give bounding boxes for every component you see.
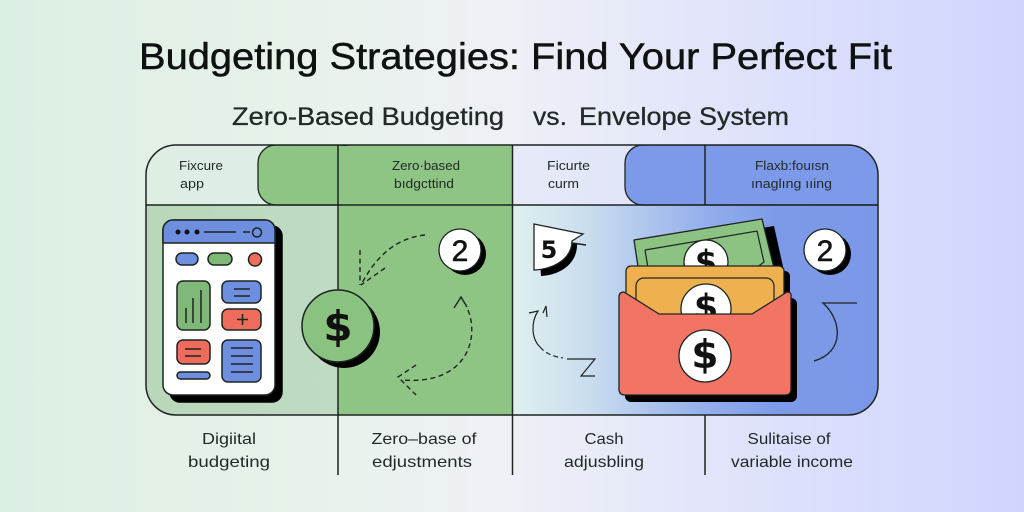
icon: number 2 badge blue panel bbox=[804, 229, 851, 275]
icon: red envelope bbox=[619, 292, 791, 395]
caption: suitable for variable income: Sulitaise of bbox=[748, 431, 831, 448]
caption: zero-base of adjustments: Zero–base of bbox=[372, 431, 477, 448]
comparison table panel bbox=[146, 145, 905, 475]
icon: number 2 badge green panel: 2 bbox=[452, 235, 468, 268]
icon: tag with 5: 5 bbox=[541, 236, 557, 264]
column header: Fixcure app: Fixcure bbox=[179, 158, 223, 173]
icon: red envelope: $ bbox=[691, 333, 719, 378]
subtitle: Envelope System bbox=[579, 103, 789, 131]
column header: Zero-based: bıdgcttind bbox=[394, 176, 454, 191]
icon: green banknote bbox=[634, 219, 784, 284]
subtitle: vs. bbox=[533, 103, 567, 131]
column header: Ficurte curm: curm bbox=[548, 176, 579, 191]
column header: Flaxb:fouisn: Flaxb:fouısn bbox=[755, 158, 829, 173]
icon: orange banknote bbox=[625, 266, 797, 402]
arrow: dashed curve bottom bbox=[398, 297, 472, 395]
icon: green dollar coin: $ bbox=[323, 302, 353, 351]
arrow: dashed curve to coin bbox=[360, 235, 425, 285]
icon: number 2 badge green panel bbox=[439, 229, 486, 275]
icon: green dollar coin bbox=[302, 290, 380, 368]
caption: suitable for variable income bbox=[731, 431, 853, 471]
caption: digital budgeting: Digiital bbox=[202, 431, 256, 448]
caption: cash adjusting: adjusbling bbox=[564, 454, 644, 471]
column header: Fixcure app bbox=[179, 158, 223, 191]
caption: cash adjusting bbox=[564, 431, 644, 471]
caption: cash adjusting: Cash bbox=[584, 431, 624, 448]
column header: Flaxb:fouisn: ınaglıng ııing bbox=[751, 176, 832, 191]
icon: number 2 badge blue panel: 2 bbox=[817, 235, 833, 268]
arrow: curved line blue panel bbox=[814, 303, 857, 361]
column header: Fixcure app: app bbox=[180, 176, 204, 191]
column header: Ficurte curm: Ficurte bbox=[547, 158, 590, 173]
column header: Zero-based bbox=[392, 158, 460, 191]
arrow: dashed curve with z-mark bbox=[529, 306, 595, 376]
column header: Ficurte curm bbox=[547, 158, 590, 191]
icon: orange banknote: $ bbox=[694, 288, 718, 328]
caption: zero-base of adjustments: edjustments bbox=[372, 454, 472, 471]
icon: green banknote: $ bbox=[695, 243, 717, 281]
subtitle bbox=[232, 103, 789, 131]
icon: budgeting app window bbox=[163, 220, 282, 402]
column header: Zero-based: Zero·based bbox=[392, 158, 460, 173]
title: Budgeting Strategies: Find Your Perfect Fit bbox=[139, 36, 893, 77]
caption: digital budgeting bbox=[188, 431, 270, 471]
caption: zero-base of adjustments bbox=[372, 431, 477, 471]
icon: tag with 5 bbox=[534, 224, 586, 276]
subtitle: Zero-Based Budgeting bbox=[232, 103, 504, 131]
caption: digital budgeting: budgeting bbox=[188, 454, 270, 471]
caption: suitable for variable income: variable income bbox=[731, 454, 853, 471]
column header: Flaxb:fouisn bbox=[751, 158, 832, 191]
